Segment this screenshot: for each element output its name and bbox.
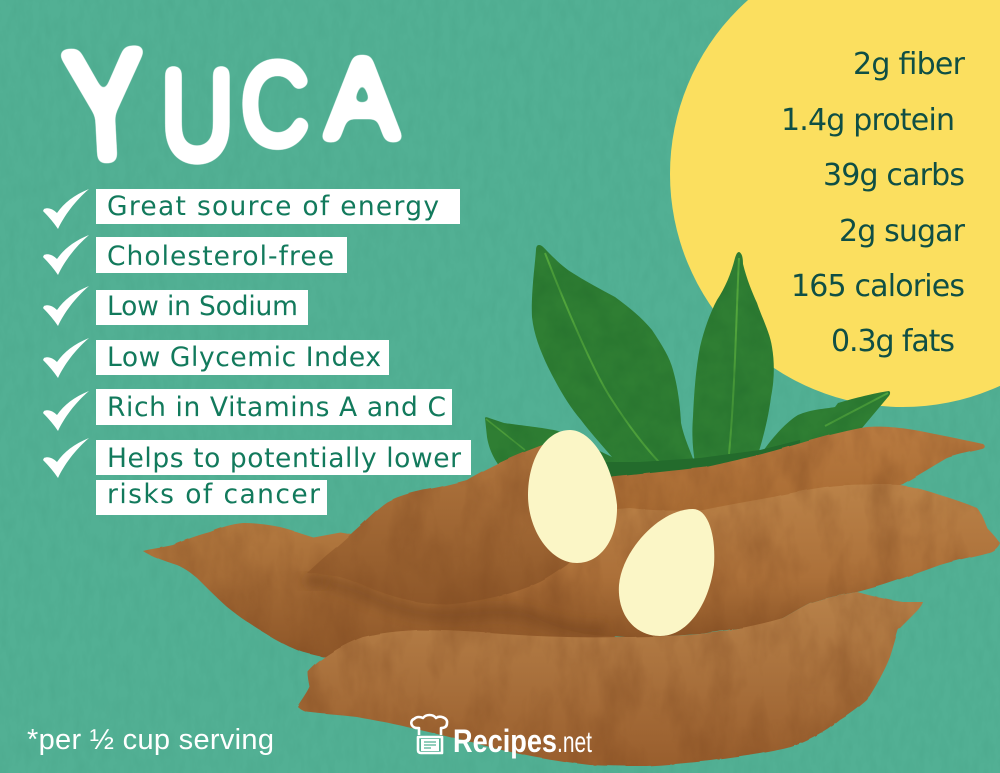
title <box>60 18 400 193</box>
item: low glycemic index: Low Glycemic Index <box>107 342 381 373</box>
item: lowers risks of cancer: Helps to potentially lower <box>107 443 461 474</box>
root: front with cut one <box>307 443 600 605</box>
root: back right top <box>590 427 985 540</box>
benefits checklist <box>43 189 471 515</box>
item: cholesterol-free: Cholesterol-free <box>107 241 334 272</box>
item: great source of energy <box>43 189 460 229</box>
root: back left <box>143 523 620 657</box>
root: middle right with cut <box>497 484 1000 638</box>
nutrition facts: 165 calories <box>791 269 965 304</box>
item: lowers risks of cancer: risks of cancer <box>107 479 320 510</box>
item: cholesterol-free <box>43 235 347 275</box>
leaf: left <box>485 417 640 480</box>
icon: chef hat and book <box>411 715 447 753</box>
yuca roots <box>143 427 1000 766</box>
root: bottom front <box>298 592 923 766</box>
item: low in sodium: Low in Sodium <box>107 291 298 322</box>
nutrition facts: 1.4g protein <box>781 103 955 138</box>
leaf base shadow <box>605 440 800 490</box>
leaf: right <box>757 391 890 460</box>
serving note: *per ½ cup serving <box>27 724 274 756</box>
wordmark: Recipes <box>453 723 557 759</box>
item: great source of energy: Great source of energy <box>107 191 439 222</box>
title: A <box>325 34 400 162</box>
leaf: large centre <box>532 245 700 480</box>
yellow nutrition circle <box>670 0 1000 407</box>
title: C <box>241 38 310 170</box>
nutrition facts: 2g fiber <box>853 47 966 82</box>
shadow under front root <box>325 582 605 630</box>
cut face one <box>528 430 617 563</box>
nutrition facts: 0.3g fats <box>831 324 955 359</box>
item: lowers risks of cancer <box>43 438 471 515</box>
leaf: upright middle <box>692 252 774 475</box>
item: low glycemic index <box>43 338 389 378</box>
nutrition facts <box>781 47 966 359</box>
cut face two <box>619 509 714 636</box>
item: low in sodium <box>43 286 308 326</box>
scuff mark on back root <box>304 575 328 587</box>
logo <box>411 715 592 759</box>
leaves <box>485 245 890 490</box>
nutrition facts: 2g sugar <box>839 214 966 249</box>
nutrition facts: 39g carbs <box>823 158 965 193</box>
item: rich in vitamins <box>43 389 452 431</box>
logo: .net <box>557 726 592 759</box>
title: Y <box>60 18 149 193</box>
title: U <box>161 43 234 187</box>
item: rich in vitamins: Rich in Vitamins A and C <box>107 392 446 423</box>
